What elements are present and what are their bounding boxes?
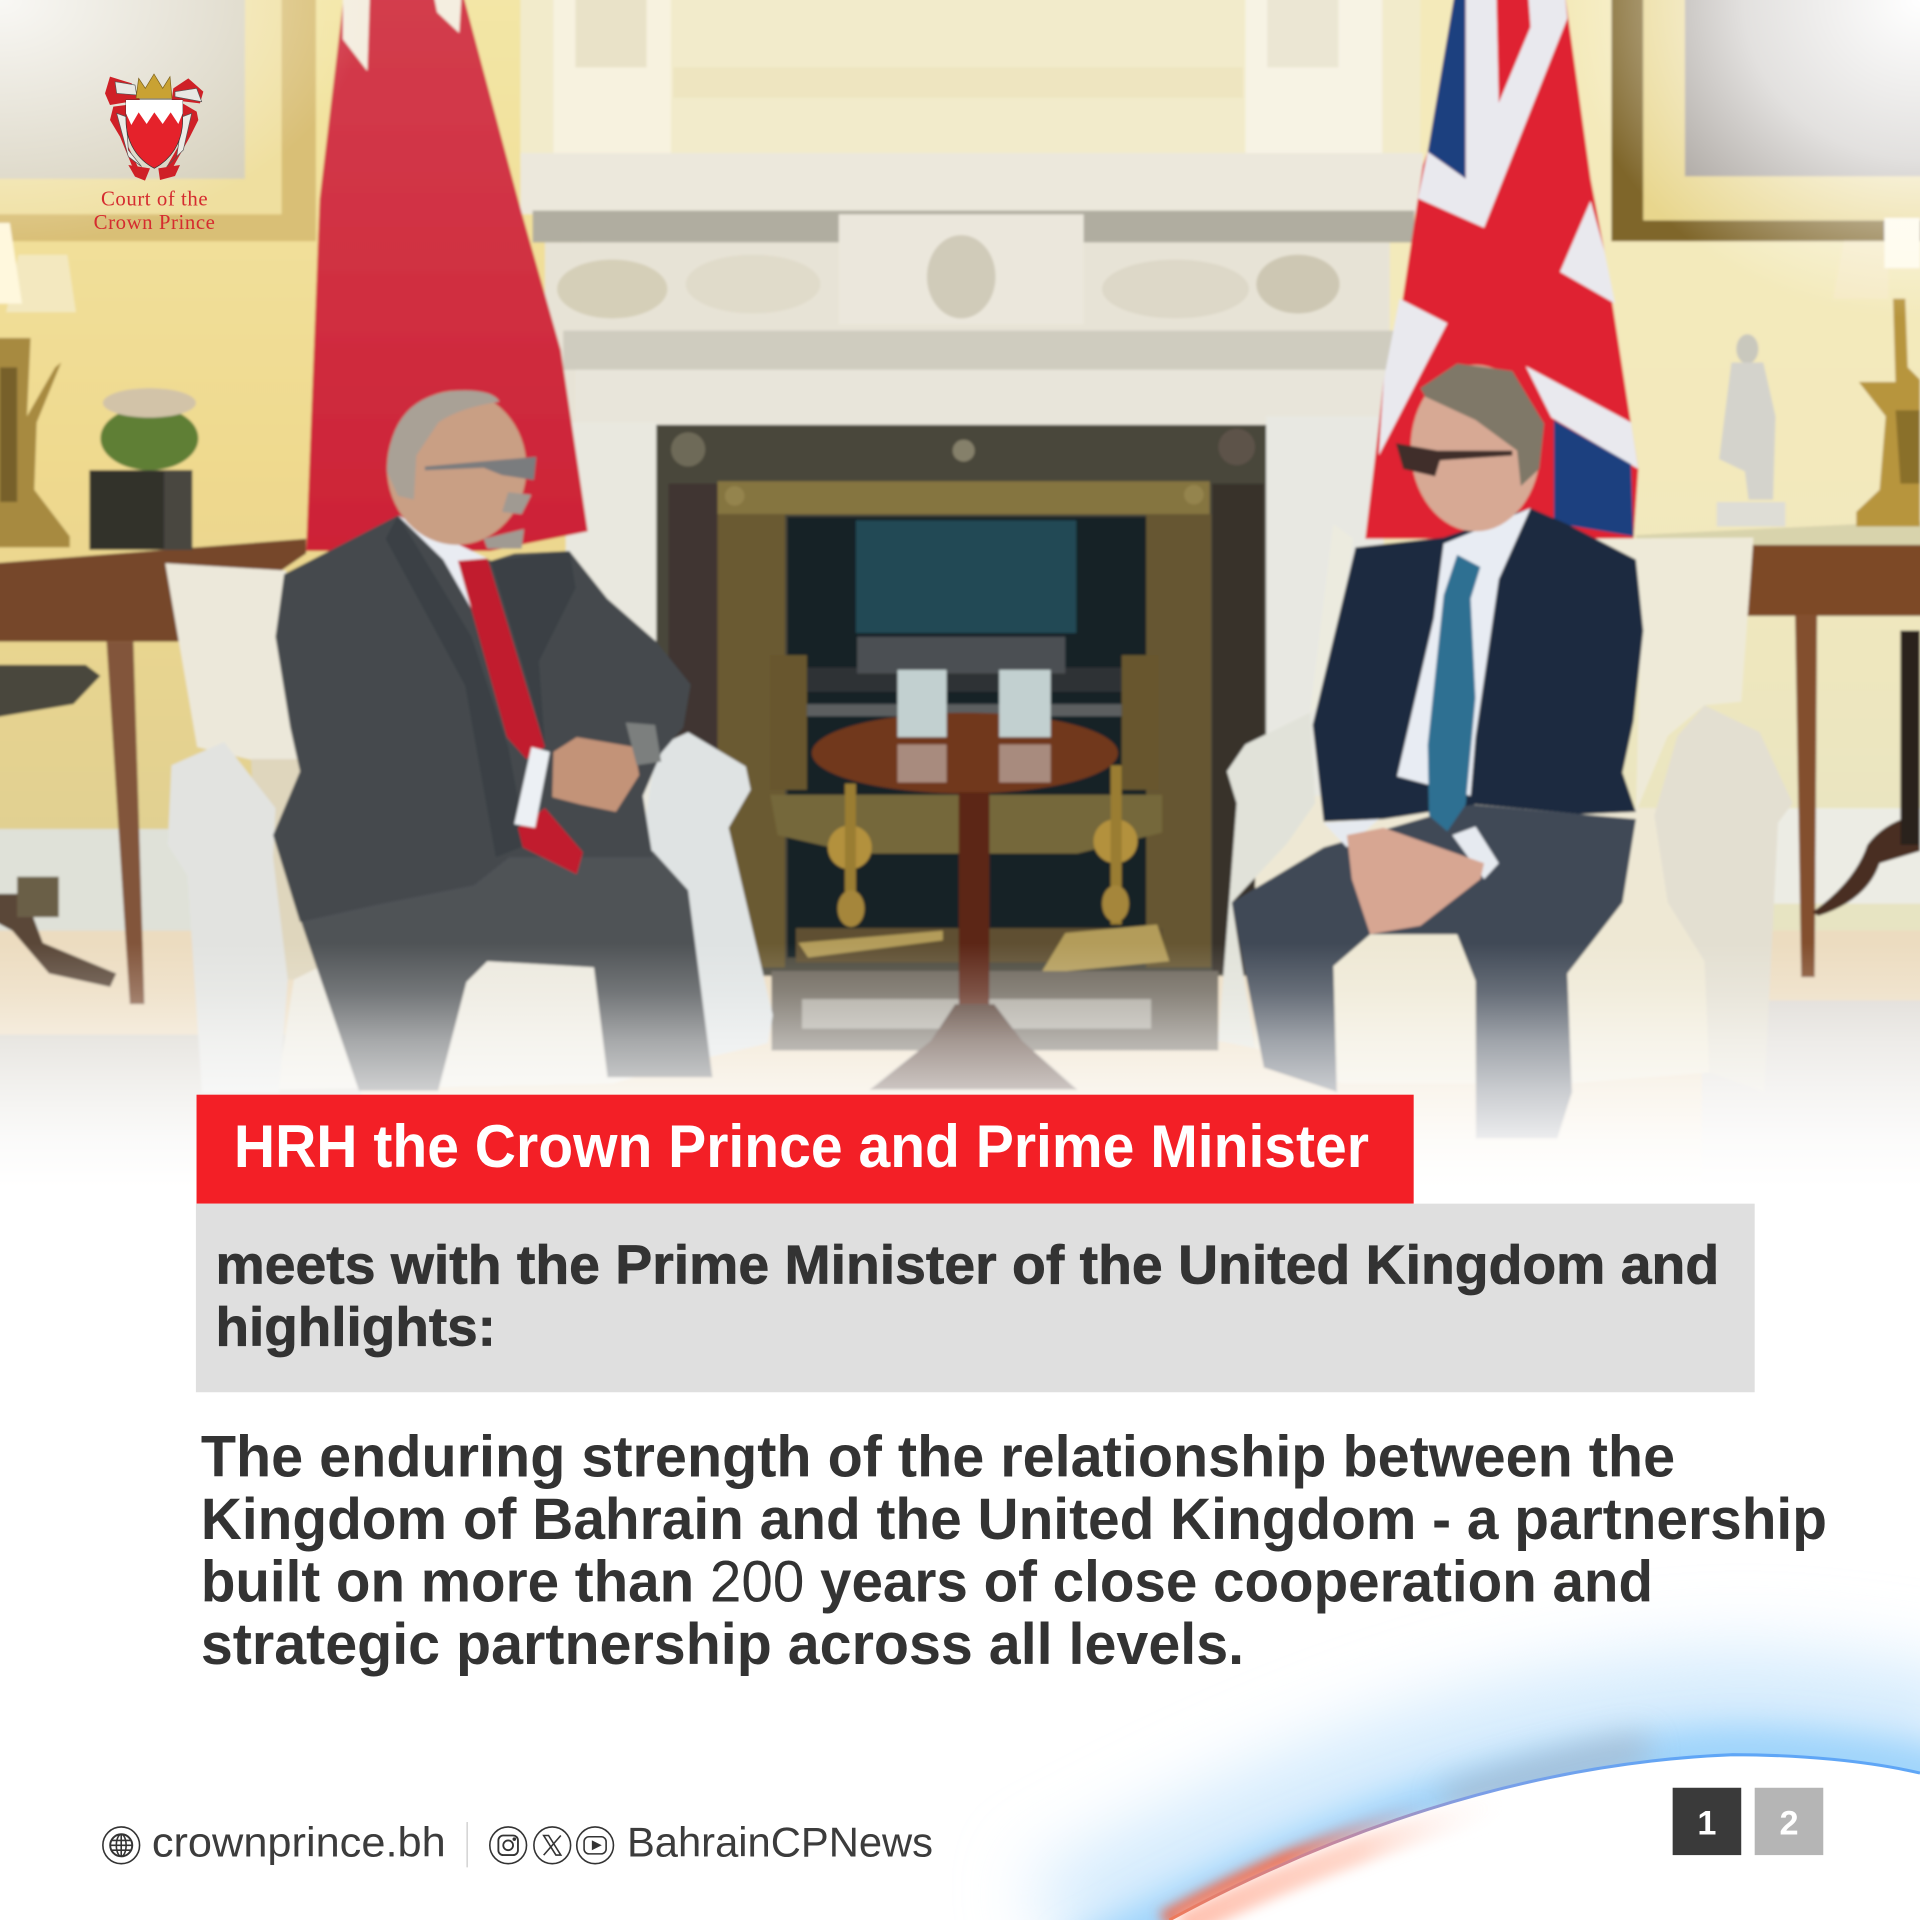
head: [387, 391, 527, 545]
white statue: [1717, 334, 1785, 527]
crest: [105, 74, 203, 181]
cuffs: [1324, 819, 1499, 879]
shirt: [398, 516, 512, 735]
body text: The enduring strength of the relationship between the: [201, 1425, 1675, 1490]
page 2 badge: 2: [1779, 1804, 1799, 1842]
title banner: [197, 1095, 1414, 1204]
subheading panel: meets with the Prime Minister of the United Kingdom and: [216, 1233, 1719, 1295]
fireplace opening: [656, 425, 1266, 1051]
white area under the wave: [1169, 1755, 1920, 1920]
trousers: [300, 851, 713, 1091]
right side table: [1636, 520, 1920, 977]
background photo: meeting in front of a fireplace: [0, 0, 1920, 1212]
logo: Court of the Crown Prince: [94, 74, 215, 234]
right lamp: [1833, 218, 1920, 527]
baseboards: [0, 808, 1920, 933]
floor and carpet: [0, 931, 1920, 1212]
body text: [201, 1425, 1827, 1677]
trousers: [1232, 804, 1636, 1139]
logo: Court of the Crown Prince: Crown Prince: [94, 210, 215, 234]
left armchair: [165, 563, 773, 1092]
hands: [1347, 828, 1484, 934]
right armchair: [1218, 524, 1793, 1092]
UK flag: [1365, 0, 1638, 539]
lapel shadow: [386, 516, 576, 857]
side table with two glasses: [812, 670, 1138, 1090]
jacket: [1313, 508, 1643, 822]
left side table: [0, 539, 306, 1004]
footer links: [103, 1818, 933, 1867]
icon: youtube: [577, 1827, 613, 1864]
Bahrain flag: [306, 0, 588, 551]
man on the left in grey suit: [273, 391, 713, 1091]
icon: X: [534, 1827, 571, 1864]
subheading panel: highlights:: [216, 1296, 496, 1358]
left framed painting: [0, 0, 316, 241]
blue tie: [1428, 555, 1480, 831]
shirt: [1397, 508, 1531, 796]
body text: strategic partnership across all levels.: [201, 1612, 1244, 1677]
left wall lamp: [0, 223, 76, 547]
walls: [0, 0, 1920, 949]
subheading panel: [196, 1204, 1755, 1392]
icon: globe: [103, 1827, 140, 1864]
head: [1411, 365, 1540, 531]
title banner: HRH the Crown Prince and Prime Minister: [234, 1113, 1369, 1180]
jacket: [273, 516, 691, 922]
white fade at bottom of photo: [0, 943, 1920, 1188]
page 2 badge: [1755, 1788, 1823, 1855]
cuff: [514, 747, 550, 828]
page indicator: [1673, 1788, 1823, 1855]
decorative wave with blue and red glow: [1078, 1749, 1920, 1920]
right framed painting: [1611, 0, 1920, 241]
body text: built on more than 200 years of close cooperation and: [201, 1550, 1653, 1615]
hands and watch: [552, 737, 639, 812]
potted plant: [89, 388, 198, 550]
website address: crownprince.bh: [152, 1818, 446, 1865]
icon: instagram: [490, 1827, 527, 1864]
organisation name: Court of the: [101, 187, 208, 211]
page 1 badge: [1673, 1788, 1741, 1855]
divider: [467, 1822, 468, 1867]
page 1 badge: 1: [1697, 1804, 1716, 1842]
fireplace surround: [520, 0, 1423, 986]
social handle: BahrainCPNews: [627, 1818, 933, 1865]
red tie: [458, 558, 583, 874]
white fade at top corners: [0, 0, 1920, 318]
man on the right in navy suit: [1232, 364, 1643, 1139]
body text: Kingdom of Bahrain and the United Kingdom - a partnership: [201, 1487, 1827, 1552]
